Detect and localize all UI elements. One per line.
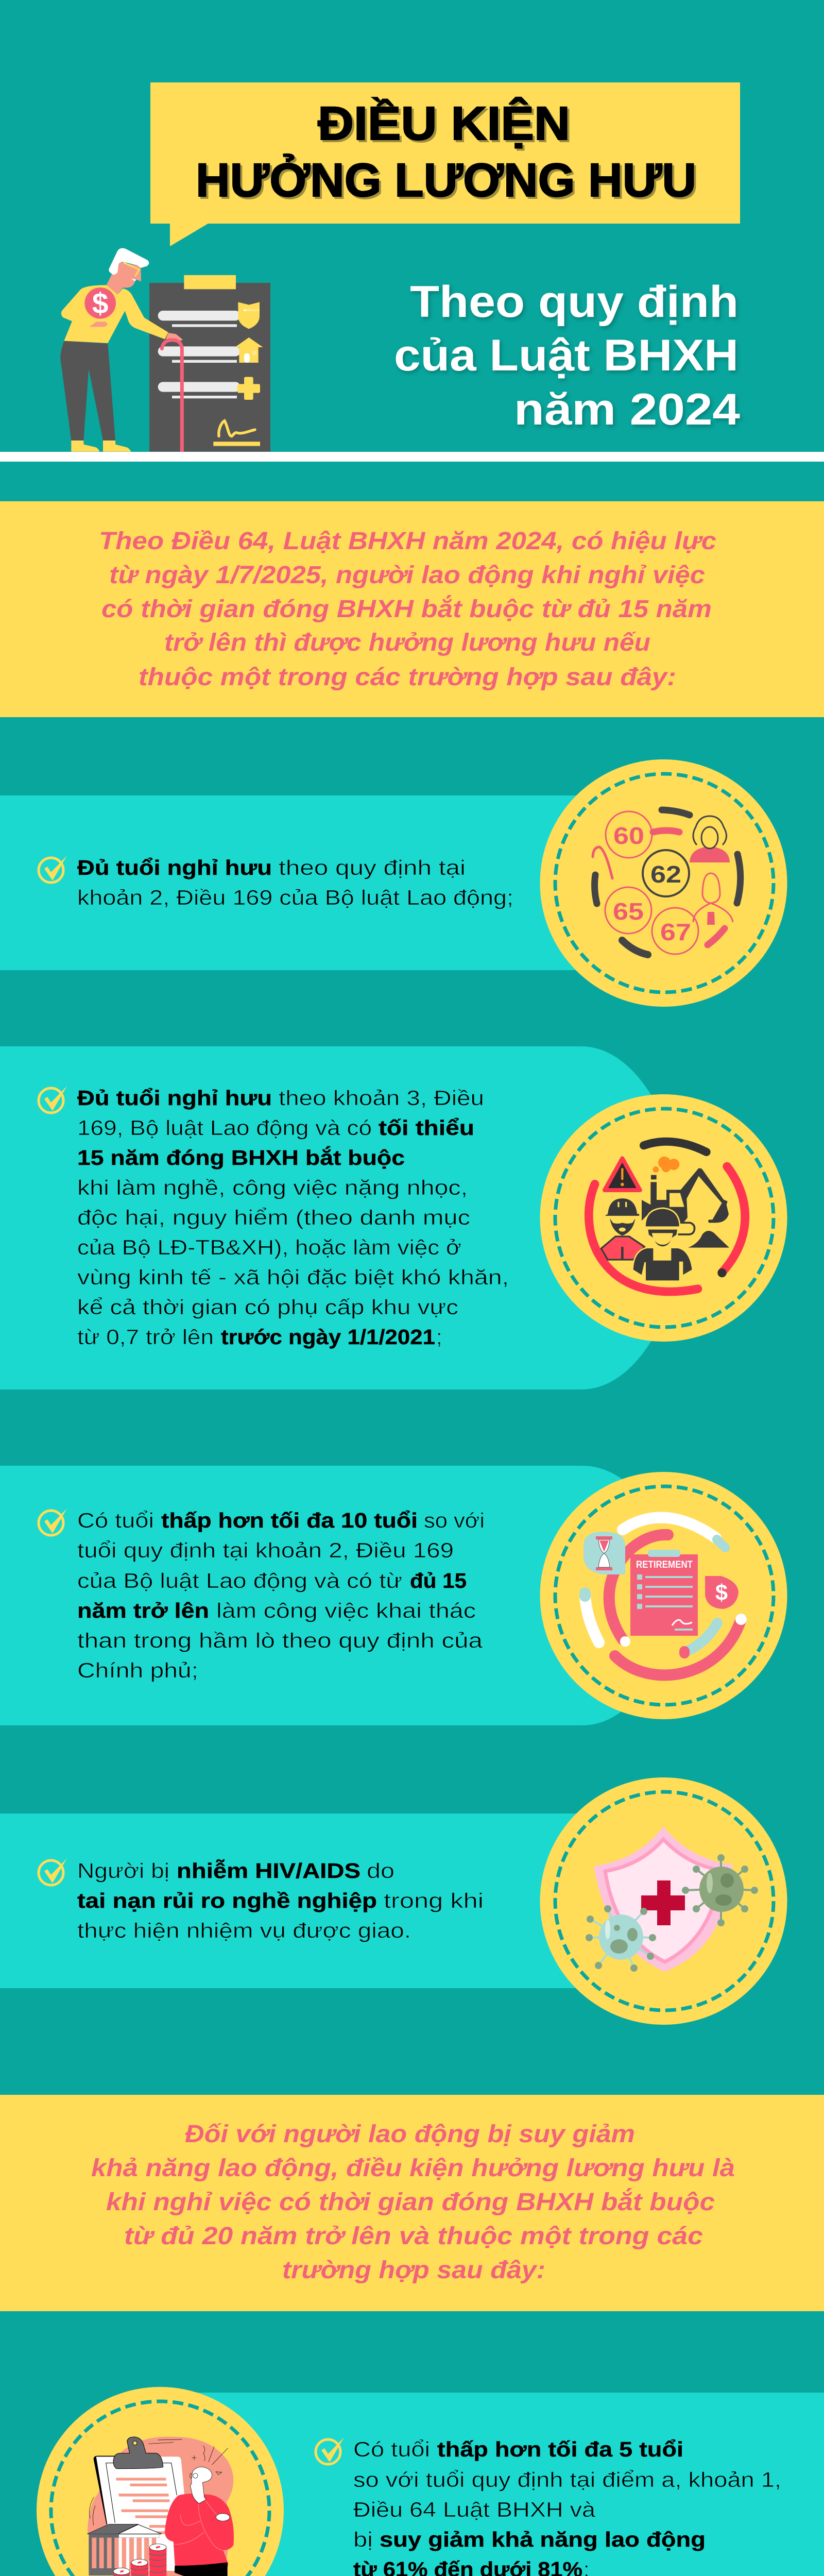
intro panel: từ ngày 1/7/2025, người lao động khi nghỉ việc — [109, 562, 705, 589]
header: title speech bubble — [150, 82, 740, 246]
text: condition 2: kể cả thời gian có phụ cấp khu vực — [77, 1295, 458, 1319]
text: condition 2: từ 0,7 trở lên — [77, 1325, 214, 1349]
text: condition 5 — [353, 2437, 781, 2576]
panel: reduced working capacity intro: Đối với người lao động bị suy giảm — [185, 2121, 635, 2148]
icon: shield and viruses badge — [540, 1777, 787, 2025]
icon: check — [39, 1509, 67, 1535]
text: condition 3: làm công việc khai thác — [216, 1599, 476, 1622]
panel: reduced working capacity intro: trường hợp sau đây: — [282, 2257, 545, 2284]
intro panel: có thời gian đóng BHXH bắt buộc từ đủ 15 năm — [101, 595, 712, 623]
text: condition 3: Có tuổi — [77, 1509, 154, 1532]
text: condition 4: tai nạn rủi ro nghề nghiệp — [77, 1889, 377, 1912]
text: condition 2: độc hại, nguy hiểm (theo danh mục — [77, 1206, 470, 1229]
icon: check — [39, 856, 67, 883]
text: condition 3: so với — [424, 1509, 485, 1532]
subtitle — [394, 277, 740, 434]
text: condition 2: của Bộ LĐ-TB&XH), hoặc làm việc ở — [77, 1235, 461, 1259]
text: condition 5: thấp hơn tối đa 5 tuổi — [437, 2437, 683, 2461]
text: condition 4: Người bị — [77, 1859, 169, 1883]
icon: check — [316, 2437, 344, 2464]
text: condition 1 — [77, 856, 513, 909]
panel: condition 3 — [0, 1466, 787, 1725]
panel: condition 4 — [0, 1777, 787, 2025]
subtitle: Theo quy định — [410, 277, 739, 327]
text: condition 3: than trong hầm lò theo quy định của — [77, 1629, 483, 1652]
panel: condition 1 — [0, 759, 787, 1007]
panel: reduced working capacity intro: từ đủ 20 năm trở lên và thuộc một trong các — [124, 2223, 703, 2250]
icon: clipboard, bank and man badge — [37, 2387, 284, 2576]
text: condition 3: đủ 15 — [410, 1569, 467, 1592]
text: condition 3: tuổi quy định tại khoản 2, Điều 169 — [77, 1538, 454, 1562]
icon: retirement document badge: $ — [715, 1580, 728, 1605]
text: condition 5: bị — [353, 2528, 373, 2551]
title line 2: HƯỞNG LƯƠNG HƯU — [196, 154, 696, 207]
text: condition 1: khoản 2, Điều 169 của Bộ luật Lao động; — [77, 886, 513, 909]
text: condition 1: Đủ tuổi nghỉ hưu — [77, 856, 272, 879]
text: condition 2: tối thiểu — [379, 1116, 474, 1140]
text: condition 5: Điều 64 Luật BHXH và — [353, 2498, 595, 2521]
text: condition 3: thấp hơn tối đa 10 tuổi — [161, 1509, 418, 1532]
text: condition 5: suy giảm khả năng lao động — [380, 2528, 706, 2551]
text: condition 2: trước ngày 1/1/2021 — [221, 1325, 435, 1349]
text: condition 5: so với tuổi quy định tại điểm a, khoản 1, — [353, 2468, 781, 2492]
intro panel: thuộc một trong các trường hợp sau đây: — [139, 664, 676, 691]
text: condition 4 — [77, 1859, 484, 1942]
panel: reduced working capacity intro — [0, 2095, 824, 2311]
text: condition 5: Có tuổi — [353, 2437, 430, 2461]
text: condition 1: theo quy định tại — [279, 856, 466, 879]
panel: reduced working capacity intro: khi nghỉ việc có thời gian đóng BHXH bắt buộc — [106, 2188, 715, 2216]
intro panel: Theo Điều 64, Luật BHXH năm 2024, có hiệu lực — [99, 528, 716, 555]
intro panel: trở lên thì được hưởng lương hưu nếu — [164, 629, 650, 656]
panel: reduced working capacity intro: khả năng lao động, điều kiện hưởng lương hưu là — [91, 2155, 735, 2182]
panel: condition 2 — [0, 1046, 787, 1389]
text: condition 4: nhiễm HIV/AIDS — [177, 1859, 360, 1883]
text: condition 4: thực hiện nhiệm vụ được giao. — [77, 1919, 411, 1942]
text: condition 2 — [77, 1086, 509, 1349]
illustration: elderly man and clipboard: $ — [92, 288, 108, 320]
text: condition 4: do — [367, 1859, 394, 1883]
text: condition 3: Chính phủ; — [77, 1658, 198, 1682]
icon: retirement document badge: RETIREMENT — [636, 1560, 693, 1570]
panel: condition 5 — [37, 2387, 824, 2576]
subtitle: năm 2024 — [514, 385, 740, 434]
icon: retirement ages badge — [540, 759, 787, 1007]
icon: retirement ages badge: 67 — [660, 919, 691, 945]
text: condition 2: Đủ tuổi nghỉ hưu — [77, 1086, 272, 1110]
white ground line — [0, 452, 824, 462]
icon: retirement ages badge: 60 — [613, 822, 644, 849]
title line 1: ĐIỀU KIỆN — [318, 97, 570, 150]
text: condition 3: của Bộ luật Lao động và có từ — [77, 1569, 402, 1592]
icon: retirement ages badge: 62 — [650, 861, 681, 888]
text: condition 2: theo khoản 3, Điều — [279, 1086, 484, 1110]
illustration: elderly man and clipboard — [60, 248, 270, 452]
text: condition 2: 15 năm đóng BHXH bắt buộc — [77, 1146, 405, 1170]
icon: retirement ages badge: 65 — [613, 898, 644, 925]
text: condition 3 — [77, 1509, 485, 1682]
text: condition 2: vùng kinh tế - xã hội đặc biệt khó khăn, — [77, 1265, 509, 1289]
text: condition 2: 169, Bộ luật Lao động và có — [77, 1116, 372, 1140]
text: condition 3: năm trở lên — [77, 1599, 209, 1622]
intro panel — [0, 501, 824, 717]
subtitle: của Luật BHXH — [394, 331, 739, 380]
text: condition 4: trong khi — [384, 1889, 484, 1912]
icon: retirement document badge — [540, 1472, 787, 1719]
text: condition 2: ; — [436, 1325, 442, 1349]
text: condition 2: khi làm nghề, công việc nặng nhọc, — [77, 1176, 468, 1199]
icon: workers and hazards badge — [540, 1094, 787, 1342]
icon: check — [39, 1086, 67, 1113]
icon: check — [39, 1858, 67, 1885]
